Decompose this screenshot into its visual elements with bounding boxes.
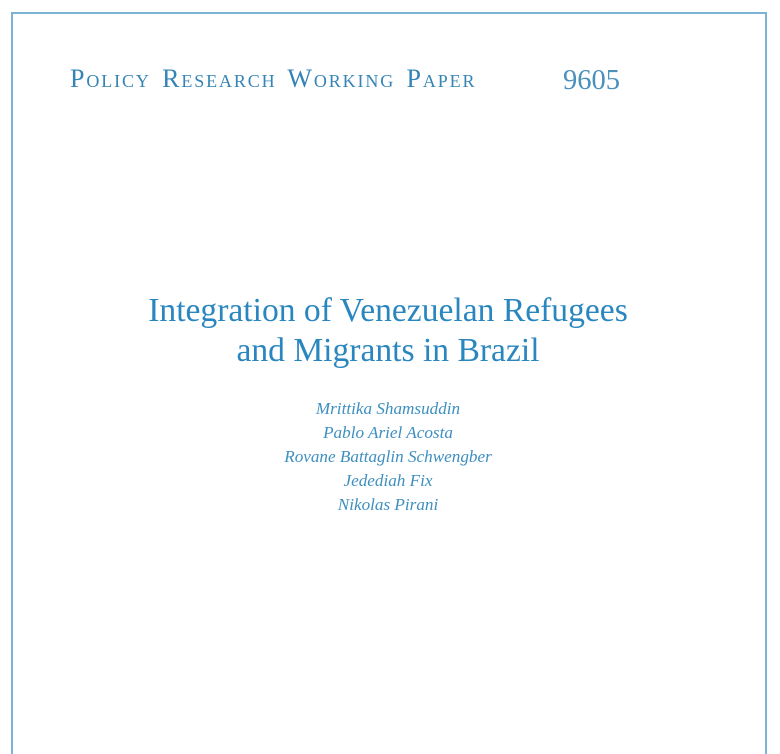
title: Integration of Venezuelan Refugees (148, 292, 628, 329)
paper number: 9605 (563, 65, 620, 96)
authors: Pablo Ariel Acosta (323, 423, 453, 442)
authors: Mrittika Shamsuddin (316, 399, 460, 418)
authors (284, 399, 492, 514)
authors: Nikolas Pirani (338, 495, 438, 514)
title (148, 292, 628, 369)
title: and Migrants in Brazil (236, 332, 540, 369)
series heading: Policy Research Working Paper: Policy Research Working Paper (70, 64, 476, 93)
authors: Jedediah Fix (344, 471, 432, 490)
authors: Rovane Battaglin Schwengber (284, 447, 492, 466)
